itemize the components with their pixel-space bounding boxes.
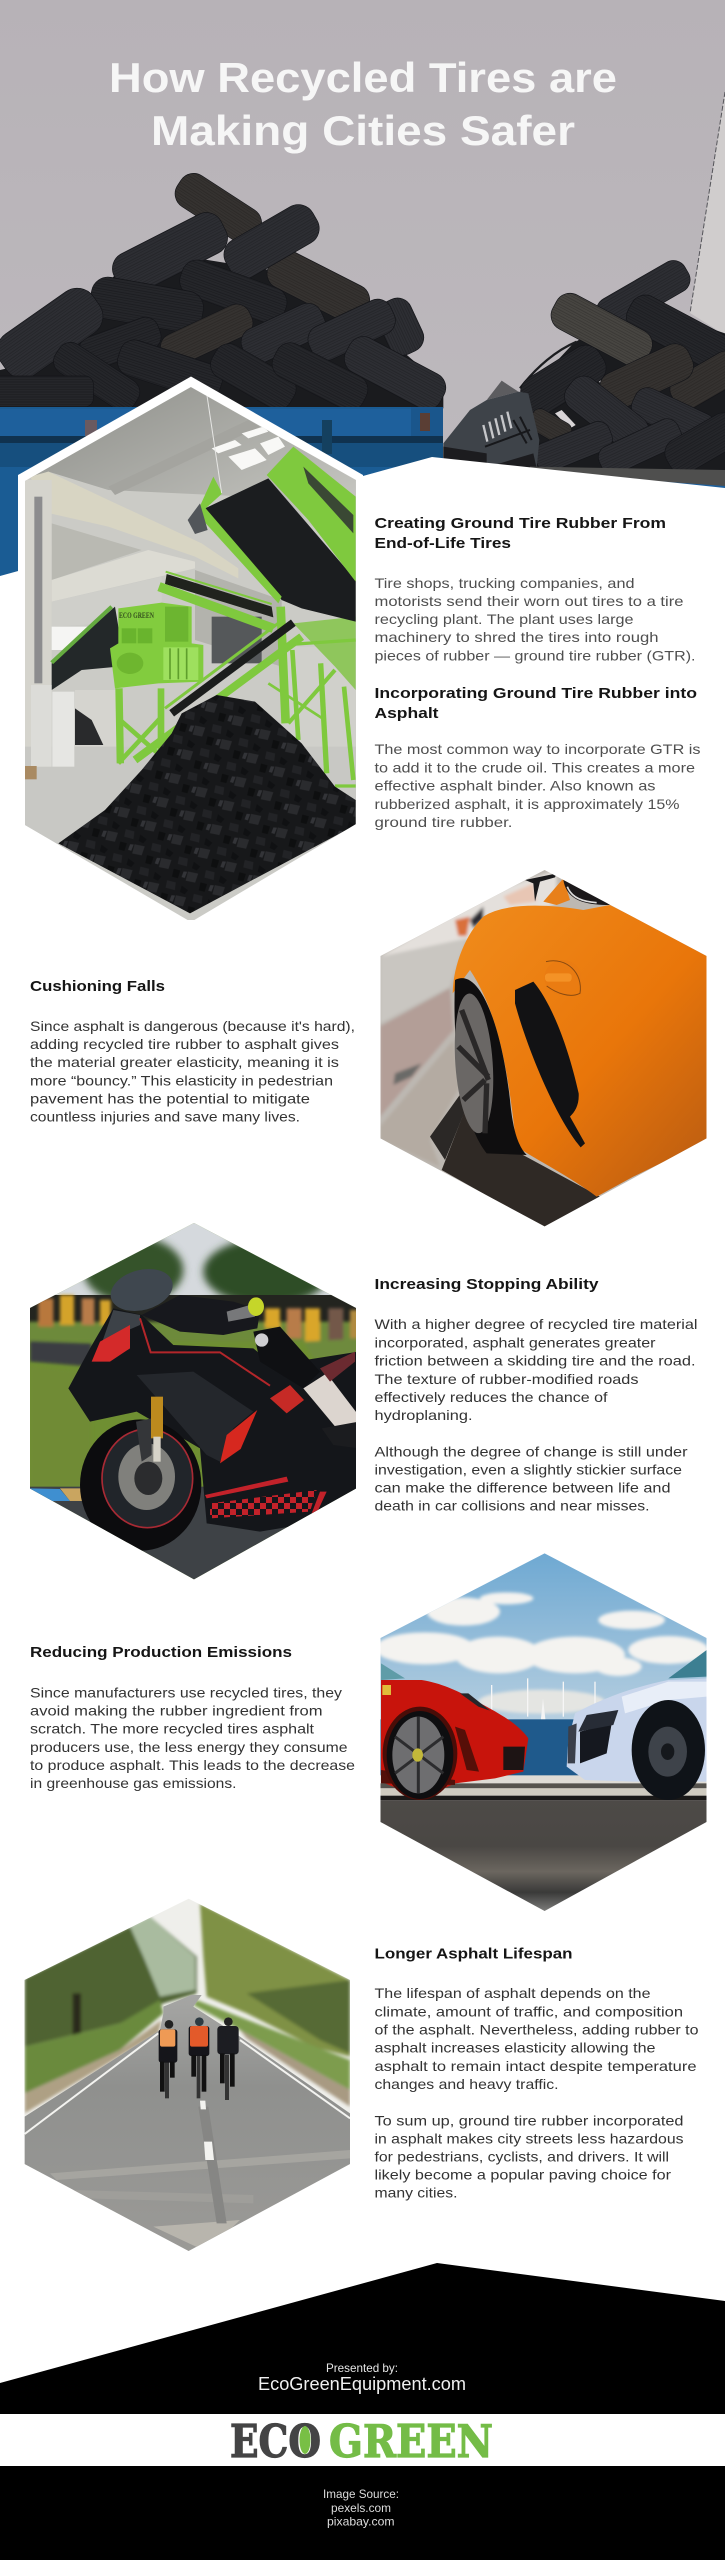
text block: increasing stopping ability — [374, 1276, 698, 1514]
main conveyor belt — [205, 478, 356, 622]
text block: cushioning falls: Cushioning Falls — [30, 978, 165, 995]
text block: increasing stopping ability: can make the difference between life and — [374, 1480, 670, 1496]
text block: increasing stopping ability: incorporated, asphalt generates greater — [374, 1334, 656, 1350]
text block: increasing stopping ability: friction between a skidding tire and the road. — [374, 1352, 696, 1368]
upper transfer conveyor — [165, 574, 273, 617]
text block: increasing stopping ability: With a higher degree of recycled tire material — [374, 1316, 698, 1332]
text block: longer asphalt lifespan: The lifespan of asphalt depends on the — [374, 1985, 651, 2001]
text block: longer asphalt lifespan: asphalt increases elasticity allowing the — [374, 2040, 656, 2056]
text block: cushioning falls: Since asphalt is dangerous (because it's hard), — [30, 1018, 355, 1034]
text block: longer asphalt lifespan: many cities. — [374, 2184, 458, 2200]
logo band: ECO — [230, 2415, 321, 2468]
text block: increasing stopping ability: Although the degree of change is still under — [374, 1444, 688, 1460]
front wheel — [80, 1419, 201, 1551]
presented by: Presented by: — [326, 2361, 398, 2375]
text block: cushioning falls: pavement has the potential to mitigate — [30, 1090, 310, 1106]
text block: reducing production emissions: Reducing Production Emissions — [30, 1644, 292, 1661]
text block: incorporating ground tire rubber: The most common way to incorporate GTR is — [374, 741, 700, 757]
text block: reducing production emissions: scratch. The more recycled tires asphalt — [30, 1720, 314, 1736]
text block: longer asphalt lifespan: To sum up, ground tire rubber incorporated — [374, 2112, 684, 2128]
footer bar — [0, 2466, 725, 2560]
door handle — [544, 960, 581, 995]
text block: creating ground tire rubber: Tire shops, trucking companies, and — [374, 575, 634, 591]
text block: reducing production emissions: Since manufacturers use recycled tires, they — [30, 1684, 342, 1700]
title — [109, 54, 617, 154]
text block: increasing stopping ability: The texture of rubber-modified roads — [374, 1371, 638, 1387]
text block: longer asphalt lifespan: Longer Asphalt Lifespan — [374, 1946, 572, 1962]
text block: cushioning falls: adding recycled tire rubber to asphalt gives — [30, 1036, 339, 1052]
text block: cushioning falls: the material greater elasticity, meaning it is — [30, 1054, 339, 1070]
text block: increasing stopping ability: death in car collisions and near misses. — [374, 1498, 650, 1514]
text block: increasing stopping ability: investigation, even a slightly stickier surface — [374, 1462, 682, 1478]
text block: creating ground tire rubber: End-of-Life Tires — [374, 535, 511, 552]
text block: longer asphalt lifespan: asphalt to remain intact despite temperature — [374, 2058, 697, 2074]
car body — [453, 905, 708, 1197]
hexagon photo: red and white sports cars — [375, 1550, 715, 1915]
text block: longer asphalt lifespan: of the asphalt. Nevertheless, adding rubber to — [374, 2022, 699, 2038]
text block: incorporating ground tire rubber — [374, 685, 700, 830]
text block: creating ground tire rubber: pieces of rubber — ground tire rubber (GTR). — [374, 648, 696, 664]
text block: incorporating ground tire rubber: rubberized asphalt, it is approximately 15% — [374, 796, 680, 812]
text block: reducing production emissions: in greenhouse gas emissions. — [30, 1775, 236, 1791]
title: Making Cities Safer — [151, 107, 575, 154]
text block: creating ground tire rubber: recycling plant. The plant uses large — [374, 611, 634, 627]
hexagon photo: racing motorcycle — [20, 1215, 367, 1587]
presented by: EcoGreenEquipment.com — [258, 2374, 466, 2394]
text block: cushioning falls — [30, 978, 355, 1124]
cyclist red vest — [189, 2017, 209, 2098]
red accents — [92, 1325, 130, 1362]
text block: longer asphalt lifespan: in asphalt makes city streets less hazardous — [374, 2130, 684, 2146]
hexagon photo: orange sports car — [370, 860, 717, 1230]
text block: cushioning falls: more “bouncy.” This elasticity in pedestrian — [30, 1072, 333, 1088]
image sources: Image Source: — [323, 2487, 399, 2501]
hexagon photo: tire shredding machine — [15, 380, 368, 920]
right tire stack — [443, 256, 725, 497]
text block: increasing stopping ability: effectively reduces the chance of — [374, 1389, 608, 1405]
text block: reducing production emissions — [30, 1644, 355, 1791]
icon: plastic crate — [443, 381, 539, 468]
hopper — [293, 617, 356, 690]
white hexagon border for first photo — [18, 376, 363, 930]
text block: incorporating ground tire rubber: effective asphalt binder. Also known as — [374, 778, 656, 794]
text block: longer asphalt lifespan — [374, 1946, 699, 2200]
image sources: pexels.com — [331, 2501, 391, 2515]
gravel band — [530, 467, 725, 487]
text block: incorporating ground tire rubber: to add it to the crude oil. This creates a more — [374, 760, 695, 776]
text block: longer asphalt lifespan: likely become a popular paving choice for — [374, 2166, 671, 2182]
text block: reducing production emissions: avoid making the rubber ingredient from — [30, 1702, 322, 1718]
text block: reducing production emissions: producers use, the less energy they consume — [30, 1739, 348, 1755]
hexagon photo: tire shredding machine: ECO GREEN — [119, 610, 154, 620]
text block: creating ground tire rubber — [374, 515, 696, 664]
text block: longer asphalt lifespan: changes and heavy traffic. — [374, 2076, 558, 2092]
text block: cushioning falls: countless injuries and save many lives. — [30, 1108, 300, 1124]
text block: incorporating ground tire rubber: ground tire rubber. — [374, 814, 512, 830]
presented by — [258, 2361, 466, 2394]
side vent — [515, 982, 585, 1147]
title: How Recycled Tires are — [109, 54, 617, 101]
rider — [110, 1269, 173, 1311]
logo band — [0, 2414, 725, 2468]
image sources — [323, 2487, 399, 2528]
text block: longer asphalt lifespan: for pedestrians, cyclists, and drivers. It will — [374, 2148, 669, 2164]
image sources: pixabay.com — [327, 2514, 394, 2528]
green support frame — [118, 607, 356, 786]
text block: increasing stopping ability: Increasing Stopping Ability — [374, 1276, 599, 1293]
motorcycle body — [68, 1308, 358, 1532]
text block: longer asphalt lifespan: climate, amount of traffic, and composition — [374, 2004, 683, 2020]
cyclist black kit — [217, 2017, 239, 2100]
red car — [381, 1663, 405, 1680]
text block: creating ground tire rubber: Creating Ground Tire Rubber From — [374, 515, 666, 532]
text block: creating ground tire rubber: machinery to shred the tires into rough — [374, 629, 658, 645]
logo band: GREEN — [329, 2415, 493, 2468]
footer panel: angled black shape — [0, 2263, 725, 2415]
cyclist orange vest — [159, 2020, 177, 2098]
text block: incorporating ground tire rubber: Asphalt — [374, 705, 438, 722]
hexagon photo: cyclists on a forest road — [20, 1890, 360, 2257]
text block: reducing production emissions: to produce asphalt. This leads to the decrease — [30, 1757, 355, 1773]
rubber pile — [58, 695, 356, 913]
text block: incorporating ground tire rubber: Incorporating Ground Tire Rubber into — [374, 685, 697, 702]
icon: silo at right edge — [690, 92, 725, 335]
left tire stack — [0, 168, 451, 416]
blue container — [0, 407, 443, 607]
hero photo: stacked tires on a blue container — [0, 0, 725, 607]
text block: increasing stopping ability: hydroplaning. — [374, 1407, 472, 1423]
icon: leaf in logo — [300, 2426, 310, 2454]
wheel arch and tire — [454, 978, 527, 1155]
green shredder — [110, 603, 203, 688]
text block: creating ground tire rubber: motorists send their worn out tires to a tire — [374, 593, 684, 609]
white car — [668, 1650, 707, 1678]
